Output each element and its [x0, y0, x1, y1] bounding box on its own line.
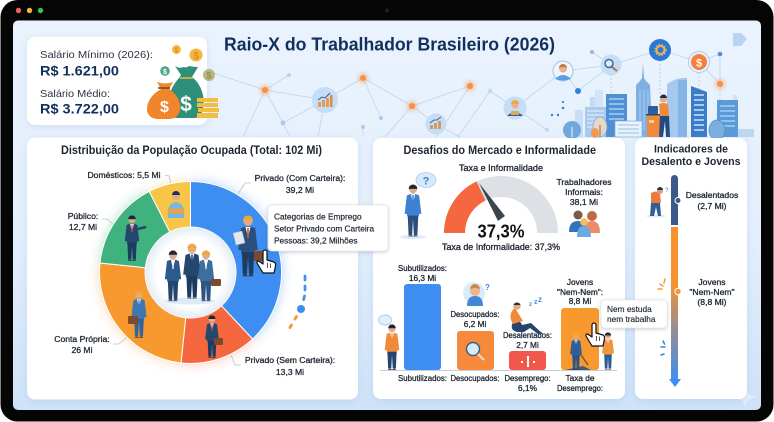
label: discouraged value: [503, 330, 552, 350]
center workers group: [165, 243, 221, 304]
axis labels: [398, 373, 603, 393]
tooltip: job category: Pessoas: 39,2 Milhões: [274, 236, 357, 246]
heading: Desalento e Jovens: [642, 156, 740, 168]
title: Raio-X do Trabalhador Brasileiro (2026): [224, 34, 555, 54]
label: self employed: 26 Mi: [71, 345, 93, 355]
panel: salaries: [27, 37, 219, 125]
label: public: [68, 211, 98, 232]
figure: informal employee: [205, 315, 223, 358]
vertical axis: [669, 175, 681, 387]
icon: chart node small: [426, 114, 446, 134]
gauge value: 37,3%: [478, 220, 525, 242]
icon: chart node: [312, 87, 338, 113]
label: unemployed value: 6,2 Mi: [464, 319, 486, 329]
figure: self employed worker: [128, 290, 147, 338]
icon: money bags: [147, 45, 219, 119]
icon: magnifier: [466, 342, 484, 360]
icon: money bags: $: [180, 93, 192, 116]
label: youth: "Nem-Nem": [689, 287, 735, 297]
icon: app logo: [733, 33, 747, 46]
label: youth: [689, 277, 735, 307]
accent ticks: [658, 279, 665, 289]
orange network nodes: [260, 73, 725, 111]
segment: private with contract: [190, 182, 281, 339]
illustration: skyline: [563, 63, 754, 140]
label: informal workers: Informais:: [565, 187, 603, 197]
minimum wage value: R$ 1.621,00: [40, 64, 119, 78]
gauge value arc: [454, 191, 481, 233]
panel: discouraged and youth: [635, 138, 747, 399]
icon: worker node: [504, 96, 526, 120]
segment: domestic: [149, 182, 190, 232]
marker: discouraged: [675, 198, 681, 204]
label: private without contract: 13,3 Mi: [276, 367, 304, 377]
minimum wage label: Salário Mínimo (2026):: [40, 50, 153, 61]
bar: unemployed: [457, 331, 494, 370]
icon: lounging person: z: [529, 302, 532, 308]
tooltip: nem-nem: nem trabalha: [607, 314, 656, 324]
figure: worker with shovel: [565, 333, 591, 370]
icon: search node: [600, 54, 622, 76]
heading: Distribuição da População Ocupada (Total: 102 Mi): [61, 144, 322, 157]
accent ticks: [661, 341, 665, 355]
label: youth value: 8,8 Mi: [569, 296, 591, 306]
label: underused value: 16,3 Mi: [409, 273, 436, 283]
label: domestic: Domésticos: 5,5 Mi: [87, 170, 161, 180]
label: unemployed value: [450, 309, 500, 329]
label: discouraged value: Desalentados:: [503, 330, 552, 340]
label: informal workers: 38,1 Mi: [570, 197, 598, 207]
icon: person node: [553, 61, 573, 81]
label: youth: (8,8 Mi): [697, 297, 727, 307]
label: underused value: Subutilizados:: [398, 263, 447, 273]
label: private without contract: Privado (Sem Carteira):: [245, 355, 335, 365]
tooltip: nem-nem: Nem estuda: [607, 304, 652, 314]
tooltip: job category: [268, 205, 388, 251]
icon: money bags: $: [163, 69, 167, 76]
figure: person beside bars: [378, 315, 399, 370]
axis labels: Subutilizados:: [398, 373, 447, 383]
donut glow: [100, 182, 281, 363]
gauge: [454, 183, 548, 233]
illustration: analyst at desk: [646, 95, 670, 137]
bar: youth: [561, 308, 599, 370]
label: discouraged: Desalentados: [686, 190, 738, 200]
label: informal workers: Trabalhadores: [556, 177, 612, 187]
label: private with contract: [255, 173, 345, 195]
panel: market challenges: [373, 138, 625, 399]
segment: self employed: [100, 263, 186, 363]
donut center: [146, 228, 236, 318]
icon: dollar node: [688, 52, 710, 72]
figure: discouraged person: [646, 187, 669, 218]
label: discouraged: (2,7 Mi): [697, 201, 727, 211]
background network: [210, 50, 722, 137]
label: youth value: "Nem-Nem":: [557, 287, 603, 297]
axis labels: Taxa de: [565, 373, 595, 383]
figure: public servant: [125, 215, 146, 261]
label: public: Público:: [68, 211, 98, 221]
icon: alert: [521, 356, 535, 367]
marker: youth: [675, 288, 681, 295]
axis labels: Desocupados:: [450, 373, 500, 383]
decorative dots: [290, 276, 305, 328]
label: self employed: [54, 334, 110, 355]
label: discouraged: [686, 190, 738, 211]
heading: Desafios do Mercado e Informalidade: [404, 144, 597, 157]
axis labels: Desemprego:: [504, 373, 550, 383]
label: underused value: [398, 263, 447, 283]
icon: worried person: ?: [485, 283, 490, 292]
cursor hand: [586, 323, 605, 346]
label: informal workers: [556, 177, 612, 207]
figure: young woman: [602, 332, 614, 369]
figure: thinking person: ?: [423, 176, 430, 188]
icon: lounging person: [510, 295, 543, 334]
gauge needle: [479, 183, 505, 221]
label: public: 12,7 Mi: [69, 222, 97, 232]
label: private with contract: Privado (Com Carteira):: [255, 173, 345, 183]
axis labels: 6,1%: [518, 383, 538, 393]
label: self employed: Conta Própria:: [54, 334, 110, 344]
icon: money bags: $: [160, 99, 169, 116]
icon: sparkle: [734, 386, 756, 408]
label: private with contract: 39,2 Mi: [286, 185, 314, 195]
icon: group of people: [569, 210, 600, 237]
figure: private employee: [233, 216, 264, 276]
average wage value: R$ 3.722,00: [40, 102, 119, 116]
icon: lounging person: z: [534, 299, 538, 306]
cursor hand: [257, 250, 276, 273]
axis labels: Desemprego:: [557, 383, 603, 393]
label: unemployed value: Desocupados:: [450, 309, 500, 319]
label: discouraged value: 2,7 Mi: [516, 340, 539, 350]
icon: money bags: $: [206, 70, 212, 80]
label: youth value: [557, 277, 603, 306]
icon: dollar node: $: [696, 58, 702, 70]
label: youth value: Jovens: [567, 277, 593, 287]
bar chart: [378, 263, 617, 393]
heading: [642, 144, 740, 168]
icon: lounging person: z: [538, 295, 542, 304]
segment: private without contract: [181, 306, 253, 363]
icon: worried person: [463, 282, 490, 306]
icon: money bags: $: [193, 51, 199, 62]
figure: domestic worker: [168, 191, 184, 218]
donut chart: [100, 182, 281, 363]
gauge subtitle: Taxa e Informalidade: [459, 163, 543, 173]
gauge caption: Taxa de Informalidade: 37,3%: [442, 242, 560, 252]
heading: Indicadores de: [654, 144, 728, 156]
average wage label: Salário Médio:: [40, 89, 110, 100]
bar: underused: [404, 284, 441, 370]
tooltip: job category: Setor Privado com Carteira: [274, 224, 374, 234]
bar: discouraged: [509, 351, 546, 370]
leader lines: [102, 175, 251, 365]
icon: money bags: $: [175, 48, 179, 54]
segment: public: [100, 191, 170, 268]
figure: thinking person: [400, 172, 436, 239]
tooltip: job category: Categorias de Emprego: [274, 212, 362, 222]
tooltip: nem-nem: [601, 300, 667, 328]
panel: population distribution: [27, 138, 358, 400]
figure: discouraged person: ?: [665, 188, 669, 194]
icon: gear node: [649, 39, 671, 61]
label: private without contract: [245, 355, 335, 377]
label: youth: Jovens: [698, 277, 726, 287]
